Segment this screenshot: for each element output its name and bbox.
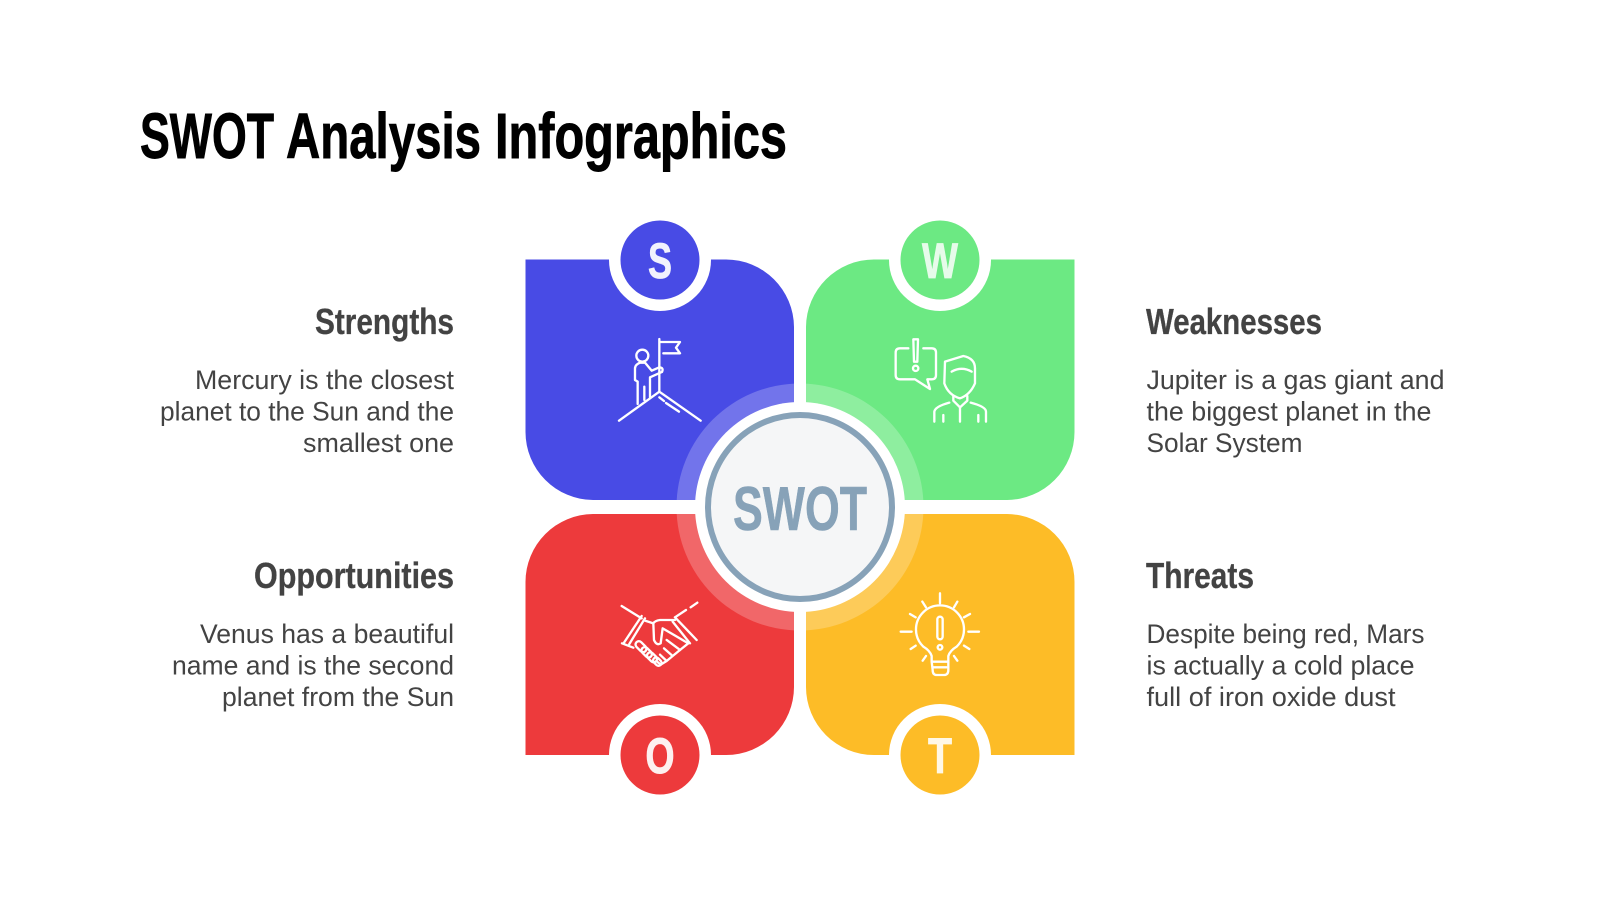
icon: person with alert speech bubble [896, 339, 986, 422]
heading: weaknesses: Weaknesses [1146, 301, 1322, 342]
description: opportunities: name and is the second [172, 650, 454, 680]
blue panel shape [526, 260, 794, 500]
description: strengths: Mercury is the closest [195, 365, 455, 395]
badge: T [889, 704, 991, 806]
center badge: SWOT: SWOT [733, 475, 867, 544]
heading: threats: Threats [1146, 555, 1254, 596]
description: opportunities [172, 619, 454, 712]
center badge: SWOT [676, 384, 924, 630]
description: threats: is actually a cold place [1146, 650, 1414, 680]
description: threats: Despite being red, Mars [1146, 619, 1424, 649]
text block: weaknesses [1146, 301, 1444, 458]
red panel shape [526, 514, 794, 755]
yellow panel shape [806, 514, 1075, 755]
description: weaknesses [1146, 365, 1444, 458]
badge: S: S [648, 233, 672, 289]
title: Analysis [286, 100, 481, 172]
title: SWOT [140, 100, 274, 172]
description: weaknesses: the biggest planet in the [1146, 396, 1432, 426]
icon: handshake [622, 603, 697, 667]
text block: threats [1146, 555, 1424, 712]
panel: opportunities [526, 514, 794, 806]
description: weaknesses: Solar System [1146, 428, 1302, 458]
description: strengths: smallest one [303, 428, 454, 458]
panel: strengths [526, 209, 794, 500]
description: strengths: planet to the Sun and the [160, 396, 454, 426]
icon: person with flag on summit [619, 339, 701, 421]
description: strengths [160, 365, 455, 458]
panel: weaknesses [806, 209, 1075, 500]
badge: W: W [922, 233, 959, 289]
text block: strengths [160, 301, 455, 458]
badge: W [889, 209, 991, 311]
description: weaknesses: Jupiter is a gas giant and [1146, 365, 1444, 395]
badge: O: O [646, 728, 674, 784]
heading: strengths: Strengths [315, 301, 454, 342]
heading: opportunities: Opportunities [254, 555, 454, 596]
title [140, 100, 787, 172]
badge: S [609, 209, 711, 311]
description: threats: full of iron oxide dust [1146, 682, 1396, 712]
green panel shape [806, 260, 1075, 500]
description: opportunities: Venus has a beautiful [200, 619, 454, 649]
badge: T: T [928, 728, 952, 784]
description: threats [1146, 619, 1424, 712]
badge: O [609, 704, 711, 806]
description: opportunities: planet from the Sun [222, 682, 454, 712]
title: Infographics [495, 100, 787, 172]
icon: light bulb with exclamation [901, 593, 979, 675]
text block: opportunities [172, 555, 454, 712]
panel: threats [806, 514, 1075, 806]
